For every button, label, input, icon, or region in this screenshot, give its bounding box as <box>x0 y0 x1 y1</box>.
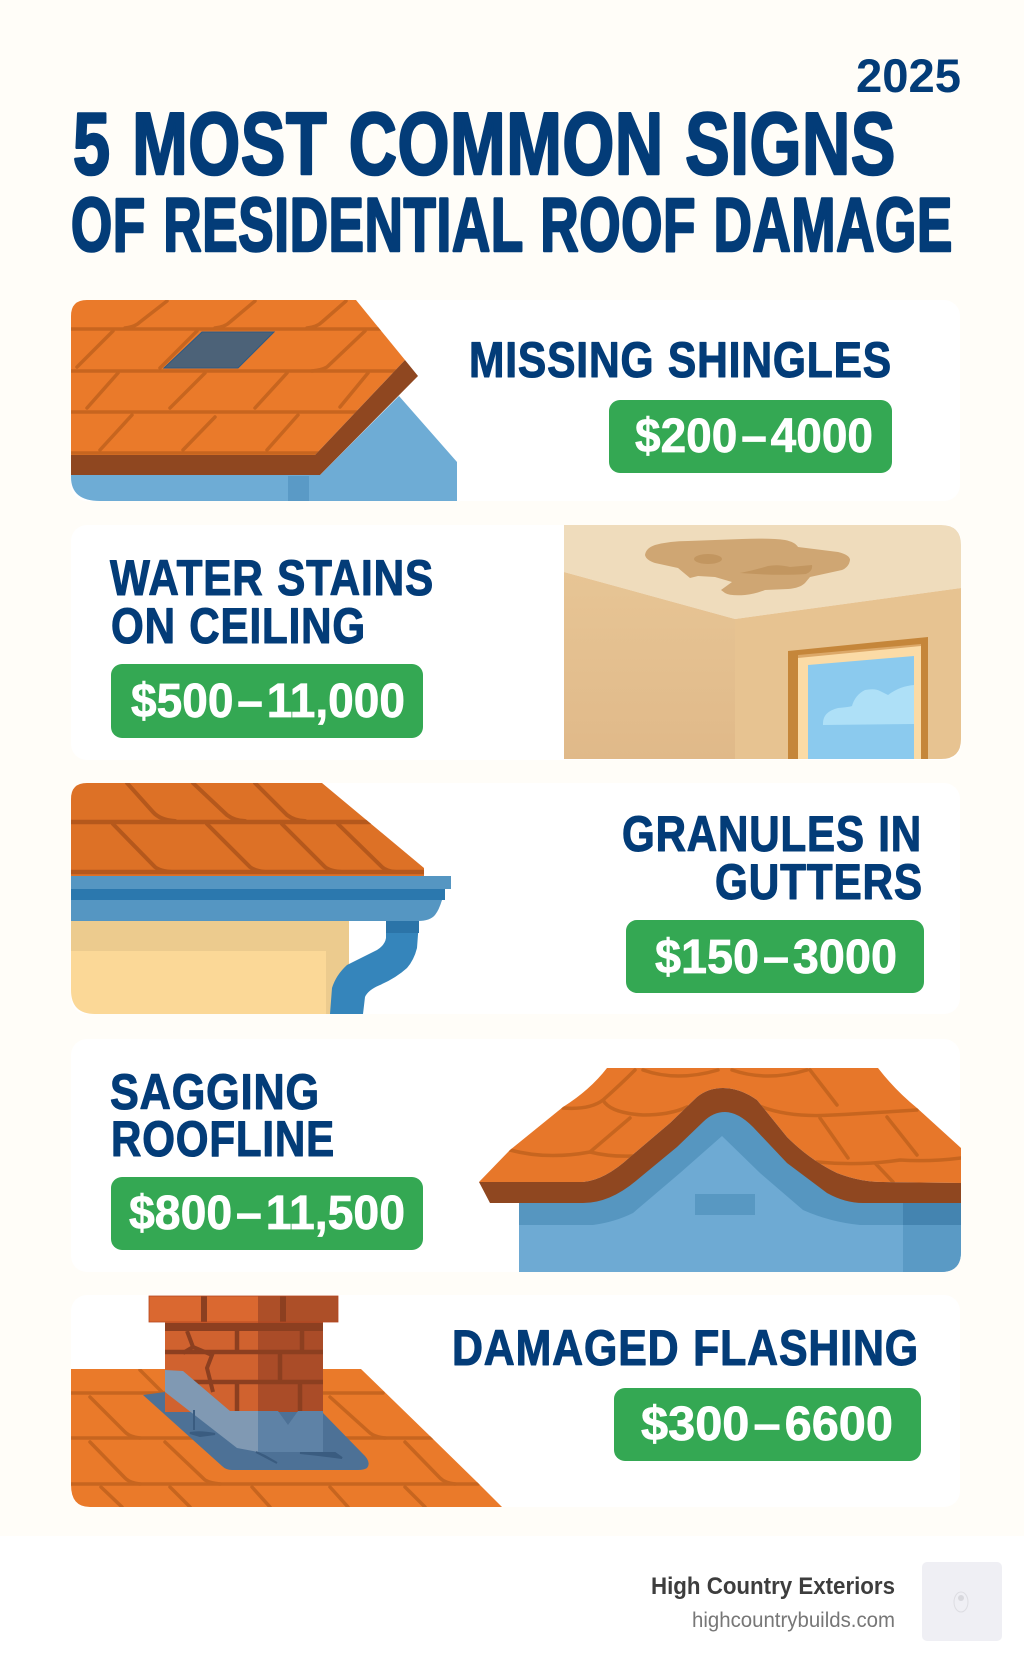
shingled roof <box>71 1369 502 1507</box>
card background <box>71 300 960 501</box>
price pill: $800 – 11,500 <box>129 1187 405 1240</box>
company name: High Country Exteriors <box>651 1573 895 1600</box>
flashing <box>258 1411 323 1452</box>
water stain <box>645 539 850 595</box>
price pill: $150 – 3000 <box>655 931 897 984</box>
missing shingle patch <box>164 332 274 368</box>
heading: ROOFLINE <box>111 1111 335 1167</box>
illustration: gutter and downspout <box>60 783 451 1014</box>
card background <box>71 1295 960 1507</box>
price pill: $500 – 11,000 <box>131 675 405 728</box>
panel: missing shingles <box>60 300 960 501</box>
heading <box>110 1064 335 1167</box>
window <box>788 637 928 759</box>
crack <box>183 1331 213 1392</box>
heading: DAMAGED FLASHING <box>452 1320 919 1376</box>
card background <box>71 525 961 760</box>
house wall <box>519 1100 961 1272</box>
illustration: sagging roof <box>479 1068 961 1272</box>
illustration: roof with missing shingle <box>60 300 457 501</box>
illustration: stained ceiling corner <box>564 525 961 759</box>
roof <box>479 1068 961 1183</box>
downspout <box>330 921 419 1014</box>
card background <box>71 1039 960 1272</box>
roof <box>71 783 424 876</box>
price pill: $200 – 4000 <box>635 410 873 463</box>
heading <box>622 806 923 910</box>
gutter <box>71 876 451 889</box>
title <box>71 94 953 268</box>
footer <box>0 1536 1024 1666</box>
year label: 2025 <box>856 49 961 102</box>
panel: granules in gutters <box>60 783 960 1014</box>
heading <box>110 550 434 654</box>
heading: MISSING SHINGLES <box>469 332 892 388</box>
chimney <box>149 1296 338 1417</box>
illustration: chimney and flashing <box>60 1296 502 1507</box>
heading: GUTTERS <box>715 854 923 910</box>
card background <box>71 783 960 1014</box>
panel: sagging roofline <box>110 1068 961 1272</box>
flashing base <box>143 1392 369 1470</box>
price pill <box>609 400 892 473</box>
price pill <box>626 920 924 993</box>
price pill <box>614 1388 921 1461</box>
price pill: $300 – 6600 <box>641 1398 893 1451</box>
heading: SAGGING <box>110 1064 320 1120</box>
price pill <box>111 1177 423 1250</box>
website: highcountrybuilds.com <box>692 1609 895 1632</box>
logo placeholder <box>922 1562 1002 1641</box>
price pill <box>111 664 423 738</box>
heading: WATER STAINS <box>110 550 434 606</box>
heading: GRANULES IN <box>622 806 922 862</box>
panel: water stains on ceiling <box>71 525 961 760</box>
footer background <box>0 1536 1024 1666</box>
panel: damaged flashing <box>60 1295 960 1507</box>
heading: ON CEILING <box>111 598 366 654</box>
wall <box>71 921 349 1014</box>
